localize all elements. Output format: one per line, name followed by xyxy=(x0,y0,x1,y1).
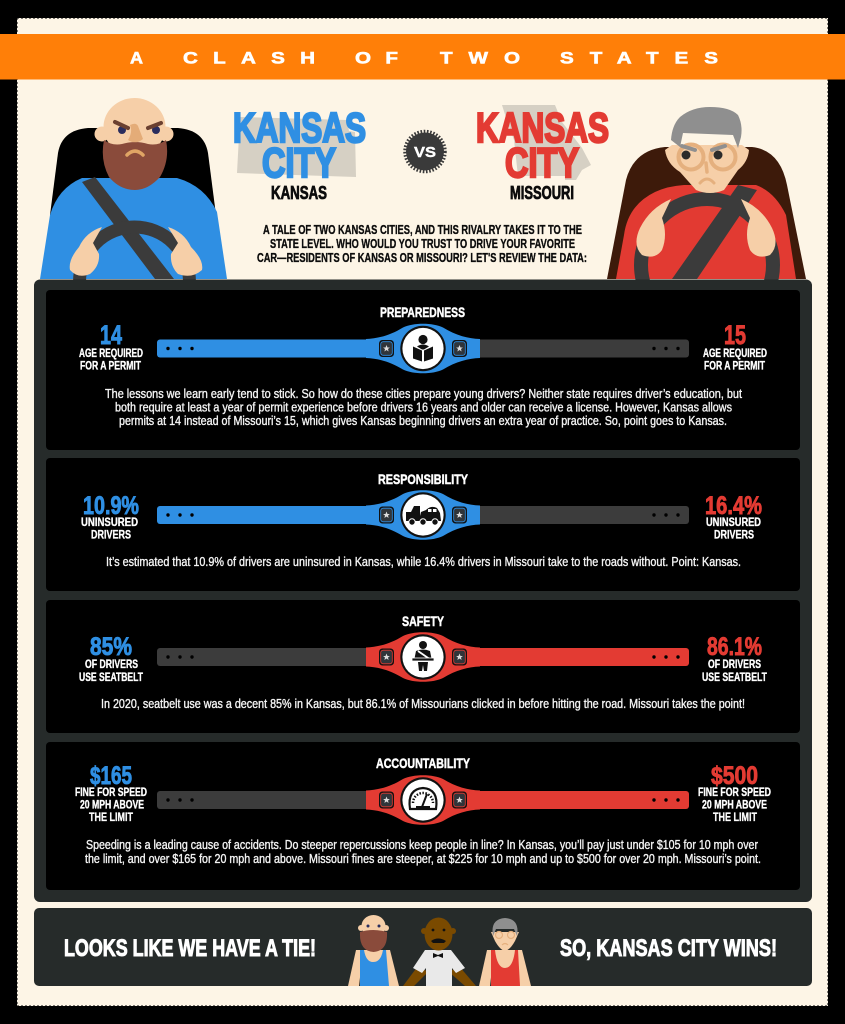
intro text xyxy=(257,222,587,265)
versus badge: VS xyxy=(414,144,436,161)
intro text: CAR—RESIDENTS OF KANSAS OR MISSOURI? LET'S REVIEW THE DATA: xyxy=(257,250,587,265)
stat: Missouri seatbelt: 86.1% xyxy=(707,633,762,661)
body text: preparedness xyxy=(105,387,742,428)
icon: tow truck xyxy=(406,506,441,525)
illustration: Missouri driver xyxy=(607,107,806,331)
belt meter: Missouri leads xyxy=(157,632,689,682)
title banner: TWO xyxy=(440,48,520,67)
stat: Missouri uninsured: DRIVERS xyxy=(714,530,754,542)
stat: Missouri fine xyxy=(698,762,771,824)
stat: Missouri uninsured xyxy=(705,492,762,542)
title banner: CLASH xyxy=(183,48,315,67)
panel: safety xyxy=(46,600,800,733)
heading: Kansas City, Missouri xyxy=(476,104,609,203)
title banner: A xyxy=(130,48,143,67)
panel: responsibility xyxy=(46,458,800,591)
stat: Kansas seatbelt: 85% xyxy=(90,633,132,661)
verdict text right: SO, KANSAS CITY WINS! xyxy=(560,935,777,962)
heading: safety: SAFETY xyxy=(402,613,444,629)
heading: preparedness: PREPAREDNESS xyxy=(380,304,465,320)
stat: Missouri fine: FINE FOR SPEED xyxy=(698,787,771,799)
stat: Kansas fine: THE LIMIT xyxy=(89,812,133,824)
panel: accountability xyxy=(46,742,800,890)
stat: Missouri fine: 20 MPH ABOVE xyxy=(702,800,767,812)
illustration: Kansas wrestler xyxy=(348,915,399,986)
heading: Kansas City, Missouri: KANSAS xyxy=(476,104,609,151)
intro text: A TALE OF TWO KANSAS CITIES, AND THIS RIVALRY TAKES IT TO THE xyxy=(263,222,582,237)
stat: Kansas uninsured: 10.9% xyxy=(83,492,139,520)
stat: Missouri permit age: AGE REQUIRED xyxy=(703,348,767,360)
title banner: STATES xyxy=(560,48,718,67)
stat: Missouri permit age: FOR A PERMIT xyxy=(704,360,765,372)
body text: accountability xyxy=(85,838,761,866)
belt meter: Missouri leads xyxy=(157,775,689,825)
heading: Kansas City, Kansas: KANSAS xyxy=(271,183,327,203)
stat: Kansas fine xyxy=(75,762,147,824)
stat: Missouri permit age xyxy=(703,320,767,372)
body text: preparedness: The lessons we learn early tend to stick. So how do these cities prepare young drivers? Neither state requires driver’s education, but xyxy=(105,387,742,401)
title banner: OF xyxy=(355,48,398,67)
icon: reader with book xyxy=(413,335,433,362)
body text: preparedness: both require at least a year of permit experience before drivers 16 years and older can receive a license. However, Kansas allows xyxy=(115,400,732,414)
icon: speedometer xyxy=(410,788,436,809)
stat: Kansas permit age xyxy=(79,320,143,372)
icon: seatbelt xyxy=(412,641,434,671)
heading: Kansas City, Missouri: MISSOURI xyxy=(510,183,574,203)
panel: data cards xyxy=(34,280,812,902)
stat: Missouri seatbelt: USE SEATBELT xyxy=(702,672,767,684)
stat: Kansas fine: 20 MPH ABOVE xyxy=(80,800,144,812)
stat: Kansas fine: $165 xyxy=(90,762,132,790)
body text: preparedness: permits at 14 instead of Missouri’s 15, which gives Kansas beginning drivers an extra year of practice. So, point goes to Kansas. xyxy=(119,414,727,428)
belt meter: Kansas leads xyxy=(157,490,689,540)
versus badge xyxy=(405,132,445,172)
stat: Missouri seatbelt xyxy=(702,633,767,684)
body text: safety: In 2020, seatbelt use was a decent 85% in Kansas, but 86.1% of Missourians clicked in before hitting the road. Missouri takes the point! xyxy=(101,697,745,711)
belt meter: Kansas leads xyxy=(157,324,689,373)
stat: Kansas uninsured: UNINSURED xyxy=(81,517,138,529)
panel: preparedness xyxy=(46,290,800,450)
stat: Missouri uninsured: 16.4% xyxy=(705,492,762,520)
heading: Kansas City, Missouri: CITY xyxy=(505,139,579,186)
stat: Kansas permit age: 14 xyxy=(100,320,122,350)
heading: responsibility: RESPONSIBILITY xyxy=(378,471,469,487)
stat: Missouri fine: THE LIMIT xyxy=(713,812,757,824)
stat: Kansas uninsured xyxy=(81,492,139,542)
stat: Missouri seatbelt: OF DRIVERS xyxy=(708,659,761,671)
verdict text left: LOOKS LIKE WE HAVE A TIE! xyxy=(64,935,316,962)
body text: responsibility: It’s estimated that 10.9% of drivers are uninsured in Kansas, while 16.4% drivers in Missouri take to the roads without. Point: Kansas. xyxy=(106,555,741,569)
title banner xyxy=(0,34,845,80)
stat: Missouri uninsured: UNINSURED xyxy=(706,517,761,529)
illustration: Missouri wrestler xyxy=(479,918,531,986)
heading: accountability: ACCOUNTABILITY xyxy=(376,755,470,771)
stat: Kansas seatbelt xyxy=(79,633,143,684)
intro text: STATE LEVEL. WHO WOULD YOU TRUST TO DRIVE YOUR FAVORITE xyxy=(270,236,575,251)
stat: Kansas permit age: AGE REQUIRED xyxy=(79,348,143,360)
stat: Kansas seatbelt: OF DRIVERS xyxy=(85,659,138,671)
stat: Kansas permit age: FOR A PERMIT xyxy=(80,360,141,372)
illustration: Kansas driver xyxy=(40,98,227,337)
stat: Kansas seatbelt: USE SEATBELT xyxy=(79,672,143,684)
stat: Kansas fine: FINE FOR SPEED xyxy=(75,787,147,799)
heading: Kansas City, Kansas xyxy=(233,104,366,203)
heading: Kansas City, Kansas: CITY xyxy=(262,139,336,186)
heading: Kansas City, Kansas: KANSAS xyxy=(233,104,366,151)
stat: Missouri fine: $500 xyxy=(711,762,758,790)
panel: verdict xyxy=(34,908,812,986)
illustration: referee xyxy=(403,918,476,986)
stat: Missouri permit age: 15 xyxy=(724,320,746,350)
stat: Kansas uninsured: DRIVERS xyxy=(91,530,131,542)
